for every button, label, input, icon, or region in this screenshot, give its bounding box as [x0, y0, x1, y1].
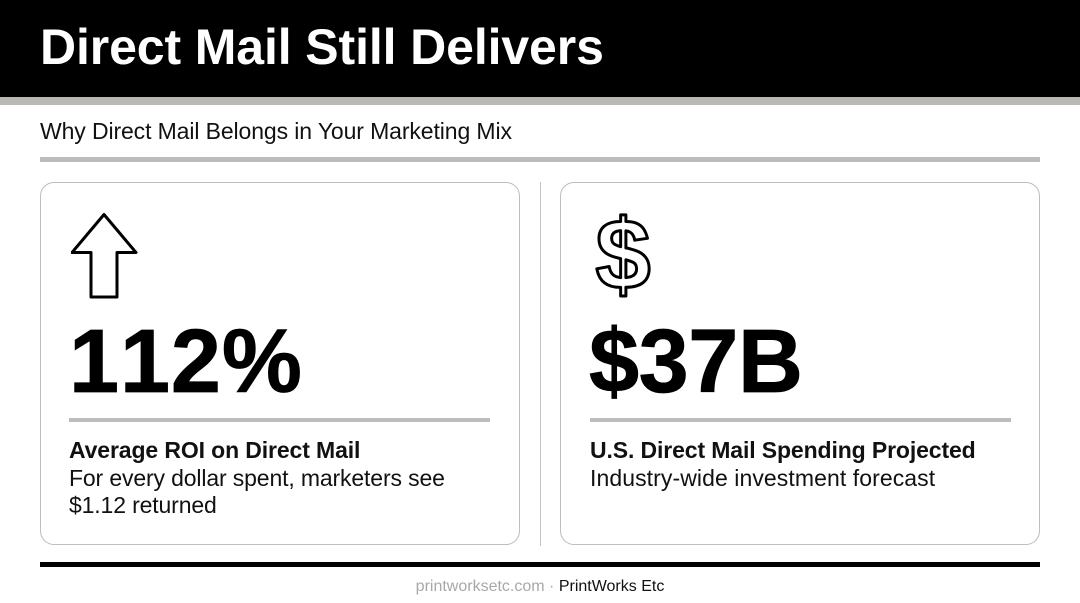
stat description: For every dollar spent, marketers see	[69, 464, 445, 490]
center divider	[540, 182, 541, 546]
stat description	[590, 437, 976, 491]
icon: up arrow	[71, 213, 138, 298]
stat description: Average ROI on Direct Mail	[69, 437, 360, 463]
stat description: U.S. Direct Mail Spending Projected	[590, 437, 976, 463]
stat rule	[590, 418, 1011, 422]
title: Direct Mail Still Delivers	[40, 19, 604, 75]
stat rule	[69, 418, 490, 422]
stat description: $1.12 returned	[69, 492, 217, 518]
footer rule	[40, 562, 1040, 567]
footer text: printworksetc.com · PrintWorks Etc	[416, 578, 664, 595]
subtitle: Why Direct Mail Belongs in Your Marketing Mix	[40, 118, 512, 144]
stat value: $37B: $37B	[589, 312, 803, 412]
stat value: 112%: 112%	[69, 312, 303, 412]
panel: ROI stat	[40, 182, 520, 545]
subtitle rule	[40, 157, 1040, 162]
header accent bar	[0, 97, 1080, 105]
header band	[0, 0, 1080, 97]
stat description	[69, 437, 445, 518]
stat description: Industry-wide investment forecast	[590, 464, 935, 490]
panel: spending stat	[560, 182, 1040, 545]
